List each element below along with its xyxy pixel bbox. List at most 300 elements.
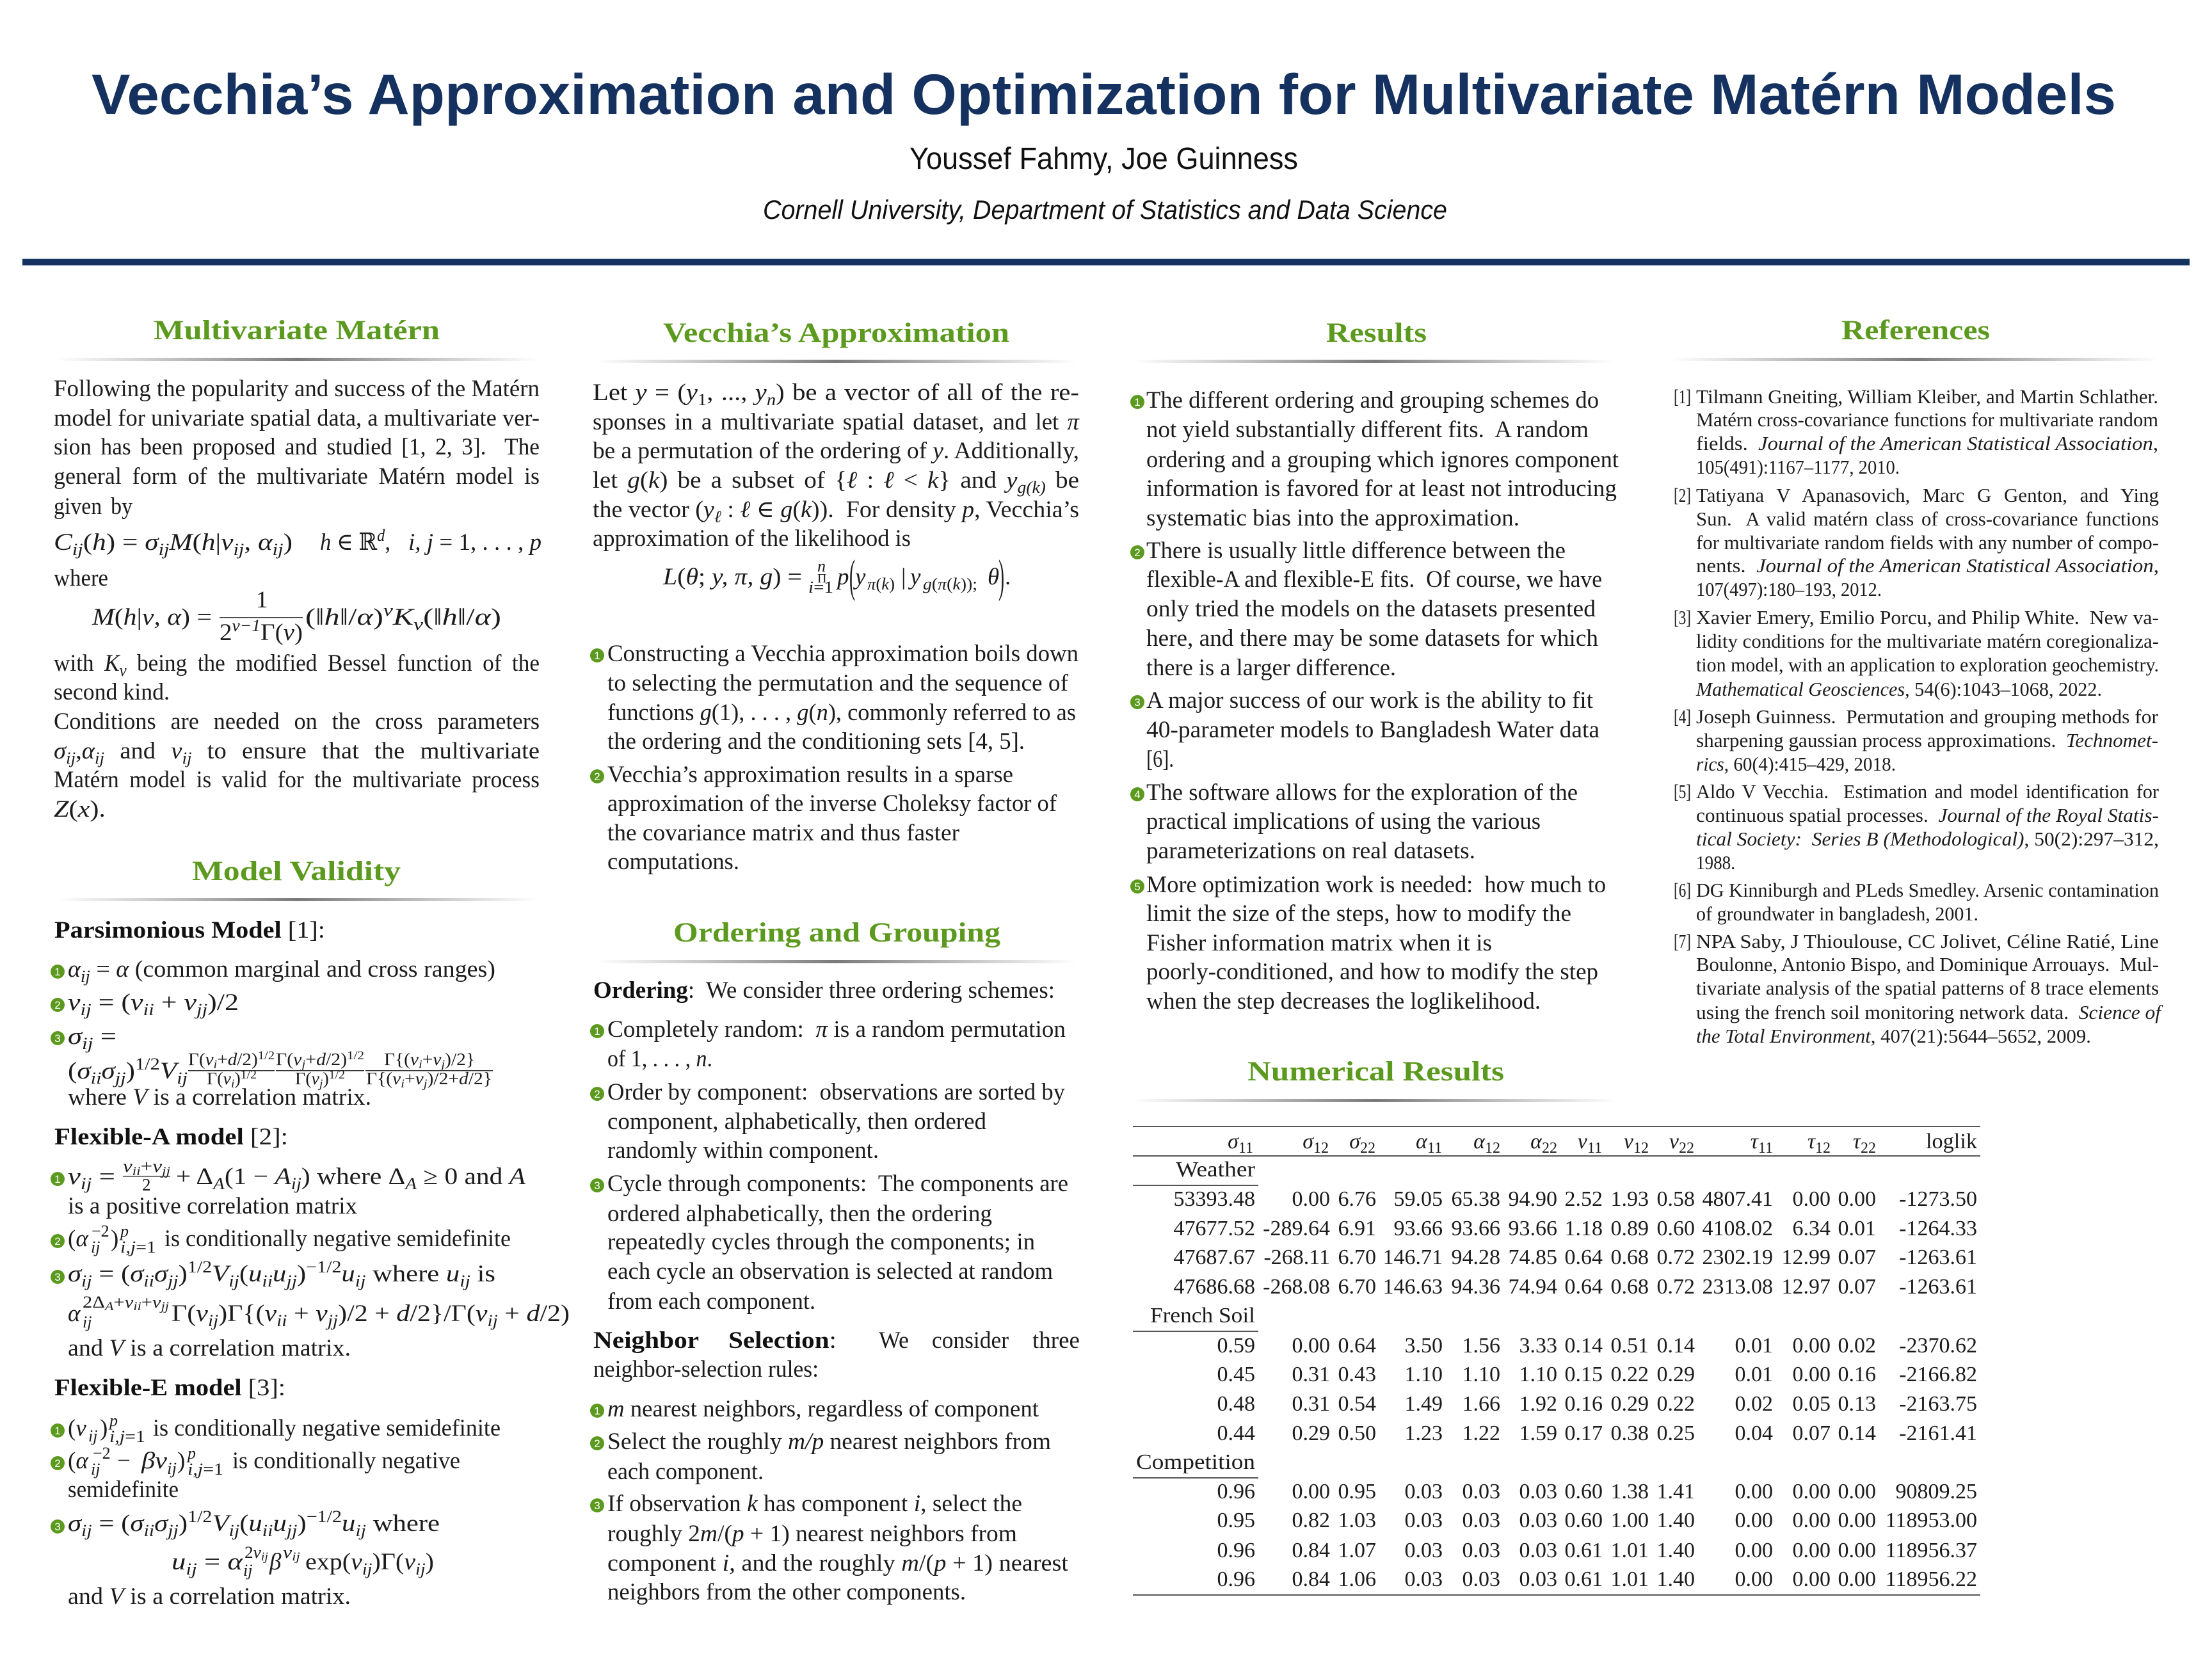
header [22, 62, 2190, 266]
explanatory text: Conditions are needed on the cross parameters [54, 709, 540, 735]
table header row: ν [1624, 1130, 1634, 1153]
group: competition: 0.03 [1519, 1567, 1557, 1591]
flexible-a list: 2Δ [83, 1293, 102, 1311]
equation: vecchia likelihood: | [901, 564, 906, 590]
flexible-e list: ) [177, 1448, 185, 1474]
parsimonious model list: σ [102, 1058, 116, 1084]
reference 4 [1674, 705, 2159, 775]
flexible-a list: A [507, 1164, 525, 1190]
flexible-a list: jj [159, 1300, 169, 1313]
flexible-a list: ( [239, 1261, 248, 1287]
reference 3: [3] [1674, 606, 1691, 629]
group: french soil: French Soil [1150, 1304, 1255, 1327]
group: competition: 0.84 [1292, 1567, 1330, 1591]
group: weather: -1273.50 [1899, 1187, 1977, 1211]
vecchia list: 2 [594, 771, 600, 783]
group: weather: 4108.02 [1703, 1217, 1773, 1240]
group: weather: 93.66 [1394, 1217, 1443, 1240]
vecchia list [590, 641, 1078, 875]
parsimonious model list: 1/2 [329, 1068, 345, 1082]
flexible-e list: is conditionally negative [232, 1448, 460, 1474]
group: competition: 1.41 [1656, 1480, 1695, 1503]
flexible-a list: ν [68, 1164, 81, 1190]
group: competition: 0.95 [1338, 1480, 1376, 1503]
table header row: ν [1578, 1130, 1588, 1153]
equation: cross covariance: M [168, 529, 194, 556]
equation: vecchia likelihood [662, 550, 1011, 602]
group: weather: 12.97 [1782, 1275, 1831, 1299]
results list: 5 [1134, 881, 1141, 893]
group: weather [1174, 1158, 1977, 1299]
group: competition: 0.61 [1564, 1539, 1603, 1562]
group: competition: 0.00 [1838, 1539, 1876, 1562]
group: competition: 1.40 [1656, 1539, 1695, 1562]
subheading: flexible-a model: Flexible-A model [2]: [54, 1124, 288, 1150]
reference 2: Tatiyana V Apanasovich, Marc G Genton, and Ying [1696, 484, 2159, 506]
table header row: 12 [1485, 1140, 1500, 1157]
flexible-e list: 1/2 [188, 1507, 212, 1526]
group: weather: 12.99 [1782, 1246, 1831, 1269]
group: weather: -1263.61 [1899, 1275, 1977, 1299]
group: weather: -1263.61 [1899, 1246, 1977, 1269]
group: french soil: 3.50 [1404, 1334, 1443, 1358]
flexible-a list: p [119, 1222, 129, 1240]
equation: matern function: (‖h‖/α) [305, 604, 381, 630]
reference 7: Boulonne, Antonio Bispo, and Dominique Arrouays. Mul- [1696, 953, 2159, 975]
ordering intro: Ordering: We consider three ordering schemes: [593, 977, 1055, 1004]
equation: vecchia likelihood: ( [849, 550, 855, 602]
equation: cross covariance: d [377, 526, 385, 545]
flexible-a list: σ [154, 1261, 169, 1287]
parsimonious model list: ν [68, 990, 81, 1016]
explanatory text: Matérn model is valid for the multivariate process [54, 767, 540, 793]
table header row: τ [1807, 1130, 1816, 1153]
group: competition: 1.38 [1610, 1480, 1649, 1503]
flexible-a list: ν [123, 1157, 132, 1176]
heading: ordering and grouping: Ordering and Grouping [673, 918, 1001, 948]
group: weather: 47686.68 [1174, 1275, 1255, 1299]
flexible-a list: jj [325, 1311, 338, 1330]
flexible-e list: ij [362, 1560, 372, 1578]
group: competition: 0.96 [1217, 1539, 1255, 1562]
group: competition: 0.60 [1564, 1509, 1603, 1532]
group: competition: 1.01 [1610, 1567, 1649, 1591]
parsimonious model list: σ [68, 1023, 83, 1050]
group: competition: 0.82 [1292, 1509, 1330, 1532]
flexible-e list: ν [404, 1549, 416, 1575]
group: weather: 93.66 [1452, 1217, 1500, 1240]
group: french soil: 0.02 [1735, 1392, 1773, 1416]
parsimonious model list: ν [184, 990, 197, 1016]
ordering list: 1 [594, 1025, 600, 1038]
flexible-e list: )Γ( [372, 1549, 404, 1575]
equation: matern function: 2 [220, 620, 232, 646]
neighbor selection intro: neighbor-selection rules: [593, 1356, 819, 1382]
flexible-e list: βν [141, 1448, 168, 1474]
group: french soil: 0.64 [1338, 1334, 1376, 1358]
results list: practical implications of using the various [1146, 808, 1541, 835]
equation: cross covariance: ij [273, 540, 284, 559]
flexible-a list: 2 [142, 1175, 151, 1194]
reference 1: Tilmann Gneiting, William Kleiber, and Martin Schlather. [1696, 385, 2158, 408]
flexible-e list: u [248, 1511, 262, 1537]
group: french soil: 0.22 [1656, 1392, 1695, 1416]
group: weather: 94.36 [1452, 1275, 1500, 1299]
definition text: : [721, 497, 740, 523]
group: competition: 118956.22 [1886, 1567, 1977, 1591]
results list: not yield substantially different fits. A random [1146, 417, 1589, 443]
panel: references [1672, 316, 2163, 1047]
flexible-a list: i,j=1 [120, 1238, 156, 1256]
reference 5 [1674, 780, 2160, 874]
group: french soil: 0.50 [1338, 1422, 1376, 1445]
neighbor selection list: If observation k has component i, select the [607, 1491, 1022, 1517]
table header row: α [1473, 1130, 1486, 1153]
equation: matern function: ν [383, 601, 394, 620]
equation: cross covariance: ij [72, 540, 83, 559]
parsimonious model list: )/2+ [428, 1069, 459, 1088]
group: french soil: 0.31 [1292, 1363, 1330, 1386]
group: competition: 0.96 [1217, 1480, 1255, 1503]
flexible-e list: where [366, 1511, 440, 1537]
parsimonious model list: Γ(ν [295, 1069, 319, 1088]
results list: [6]. [1146, 746, 1174, 773]
explanatory text: ij [95, 749, 104, 767]
flexible-e list: ) [100, 1415, 108, 1441]
flexible-a list: ) where Δ [301, 1164, 405, 1190]
group: competition: 118953.00 [1886, 1509, 1977, 1532]
group: competition: 0.03 [1462, 1539, 1500, 1562]
group: competition: 0.03 [1404, 1480, 1443, 1503]
heading: results: Results [1326, 318, 1427, 348]
parsimonious model list: ij [177, 1069, 188, 1087]
reference 5: 1988. [1696, 851, 1735, 874]
intro text: Following the popularity and success of the Matérn [54, 376, 540, 402]
parsimonious model list: + [405, 1069, 415, 1088]
group: weather: 65.38 [1452, 1187, 1500, 1211]
table header row: 12 [1313, 1140, 1329, 1157]
definition text: Let y = (y [593, 380, 696, 406]
group: competition: 0.00 [1838, 1509, 1876, 1532]
reference 1: fields. Journal of the American Statistical Association , [1696, 432, 2158, 454]
flexible-e list: and V is a correlation matrix. [68, 1583, 351, 1610]
table header row: α [1416, 1130, 1428, 1153]
flexible-a list: A [212, 1174, 225, 1193]
explanatory text: ij [182, 749, 192, 767]
neighbor selection intro: Neighbor [593, 1327, 699, 1354]
definition text: ) be a vector of all of the re- [776, 380, 1079, 406]
flexible-a list: ij [228, 1272, 239, 1290]
header divider bar [22, 259, 2190, 266]
parsimonious model list: 1/2 [347, 1049, 364, 1062]
group: weather: 2302.19 [1703, 1246, 1773, 1269]
flexible-e list: σ [154, 1511, 169, 1537]
parsimonious model list: i [231, 1077, 234, 1091]
flexible-a list: = ( [92, 1261, 130, 1287]
group: weather: 0.72 [1656, 1275, 1695, 1299]
ordering list: Completely random: π is a random permutation [607, 1016, 1066, 1043]
group: french soil: 1.49 [1404, 1392, 1443, 1416]
flexible-a list: + Δ [176, 1164, 209, 1190]
flexible-e list: 2ν [244, 1543, 260, 1562]
group: competition: 0.03 [1462, 1509, 1500, 1532]
group: weather: 93.66 [1508, 1217, 1557, 1240]
neighbor selection intro: consider [932, 1327, 1009, 1354]
parsimonious model list: ) [126, 1058, 135, 1084]
neighbor selection list: roughly 2m/(p + 1) nearest neighbors from [607, 1521, 1017, 1547]
equation: cross covariance: ij [233, 540, 244, 559]
parsimonious model list: 1/2 [135, 1055, 160, 1073]
results list: when the step decreases the loglikelihood. [1146, 988, 1541, 1014]
group: weather: 0.07 [1838, 1246, 1876, 1269]
reference 6: [6] [1674, 879, 1691, 901]
group: weather: 0.89 [1610, 1217, 1649, 1240]
group: weather: 0.07 [1838, 1275, 1876, 1299]
vecchia list: Constructing a Vecchia approximation boils down [607, 641, 1078, 667]
results list: 2 [1134, 547, 1141, 559]
group: french soil: 0.43 [1338, 1363, 1376, 1386]
parsimonious model list: d/2) [316, 1050, 345, 1069]
flexible-e list: i,j=1 [188, 1460, 223, 1479]
group: french soil: 0.29 [1656, 1363, 1695, 1386]
flexible-a list: ij [487, 1311, 498, 1330]
group: french soil: 0.22 [1610, 1363, 1649, 1386]
group: competition: 0.00 [1792, 1480, 1831, 1503]
parsimonious model list: ii [91, 1069, 102, 1087]
flexible-e list: 1 [54, 1425, 61, 1437]
flexible-a list: + [498, 1301, 526, 1327]
table header row: 11 [1758, 1140, 1773, 1157]
heading: references: References [1841, 316, 1990, 346]
parsimonious model list: ν [433, 1050, 441, 1069]
flexible-a list: A [104, 1300, 114, 1313]
group: competition: 0.03 [1404, 1509, 1443, 1532]
reference 7: tivariate analysis of the spatial patterns of 8 trace elements [1696, 977, 2159, 999]
results list: ordering and a grouping which ignores component [1146, 447, 1619, 473]
flexible-e list: ) [426, 1549, 434, 1575]
flexible-e list: jj [166, 1521, 179, 1540]
flexible-e list: = ( [92, 1511, 130, 1537]
flexible-a list: and V is a correlation matrix. [68, 1335, 351, 1361]
parsimonious model list: (σ [68, 1058, 89, 1084]
flexible-e list: ) [179, 1511, 188, 1537]
table header row [1228, 1130, 1977, 1157]
group: competition: 0.95 [1217, 1509, 1255, 1532]
flexible-a list: −2 [92, 1222, 109, 1240]
flexible-a list: ) [297, 1261, 306, 1287]
explanatory text: Z(x). [54, 796, 106, 822]
group: competition: 1.03 [1338, 1509, 1376, 1532]
flexible-a list: + [141, 1157, 152, 1176]
affiliation: Cornell University, Department of Statistics and Data Science [763, 195, 1447, 225]
flexible-e list: (ν [68, 1415, 86, 1441]
flexible-a list: σ [68, 1261, 83, 1287]
neighbor selection intro: three [1032, 1327, 1080, 1354]
flexible-e list: ii [143, 1521, 154, 1540]
group: competition: 0.00 [1792, 1567, 1831, 1591]
parsimonious model list: = [90, 956, 116, 982]
flexible-e list: ij [186, 1560, 197, 1578]
neighbor selection list [590, 1396, 1069, 1605]
heading: multivariate matern: Multivariate Matérn [154, 316, 440, 346]
flexible-e list: α [228, 1549, 244, 1575]
table header row: τ [1853, 1130, 1862, 1153]
flexible-e list: i,j=1 [109, 1427, 145, 1446]
group: weather: 1.18 [1564, 1217, 1603, 1240]
group: weather: 47677.52 [1174, 1217, 1255, 1240]
parsimonious model list: α (common marginal and cross ranges) [116, 956, 485, 982]
parsimonious model list: 2 [54, 999, 61, 1011]
equation: matern function: ν−1 [232, 616, 260, 635]
flexible-a list [51, 1157, 570, 1361]
flexible-a list: Γ(ν [172, 1301, 207, 1327]
definition text: be [1046, 467, 1079, 493]
intro text: general form of the multivariate Matérn model is [54, 463, 540, 490]
equation: vecchia likelihood: n [817, 557, 826, 575]
group: french soil: 0.29 [1610, 1392, 1649, 1416]
results list: systematic bias into the approximation. [1146, 505, 1519, 531]
equation: vecchia likelihood: ) [998, 550, 1004, 602]
vecchia list: to selecting the permutation and the sequence of [607, 670, 1069, 696]
definition text: n [767, 390, 776, 409]
equation: vecchia likelihood: i=1 [808, 578, 833, 597]
flexible-a list: u [273, 1261, 286, 1287]
parsimonious model list: d/2} [459, 1069, 490, 1088]
flexible-a list: u [341, 1261, 355, 1287]
flexible-a list: = [92, 1164, 115, 1190]
group: competition [1136, 1450, 1977, 1591]
ordering list: Cycle through components: The components are [607, 1171, 1068, 1197]
equation: cross covariance: α [258, 529, 274, 556]
equation: vecchia likelihood: π(k) [867, 575, 895, 593]
flexible-a list: where [365, 1261, 446, 1287]
results list: poorly-conditioned, and how to modify the step [1146, 959, 1598, 985]
group: competition: 0.03 [1519, 1480, 1557, 1503]
flexible-a list: A [404, 1174, 417, 1193]
neighbor selection list: neighbors from the other components. [607, 1579, 966, 1605]
panel: multivariate matern [54, 316, 541, 822]
flexible-a list: 1/2 [188, 1258, 212, 1276]
neighbor selection list: 2 [594, 1438, 600, 1450]
group: weather: 1.93 [1610, 1187, 1649, 1211]
explanatory text: α [82, 738, 96, 764]
table header row: 12 [1815, 1140, 1831, 1157]
flexible-a list: ii [133, 1300, 141, 1313]
group: french soil: 1.56 [1462, 1334, 1500, 1358]
flexible-e list: ij [415, 1560, 426, 1578]
group: weather: -268.08 [1263, 1275, 1330, 1299]
results list: 4 [1134, 789, 1141, 801]
flexible-a list: ii [276, 1311, 287, 1330]
flexible-e list: β [269, 1549, 282, 1575]
group: weather: 2313.08 [1703, 1275, 1773, 1299]
group: competition: 0.00 [1735, 1509, 1773, 1532]
reference 6 [1674, 879, 2159, 925]
subheading: parsimonious model: Parsimonious Model [1]: [54, 917, 325, 943]
definition text: y [752, 380, 767, 406]
reference 4: [4] [1674, 705, 1691, 728]
group: french soil: 1.10 [1462, 1363, 1500, 1386]
panel: multivariate matern: where [54, 565, 108, 591]
flexible-e list: 2 [54, 1457, 61, 1470]
definition text: , ..., [707, 380, 755, 406]
flexible-e list [51, 1411, 501, 1610]
intro text: given by [54, 493, 132, 520]
equation: matern function: 1 [256, 587, 268, 613]
reference 2 [1674, 484, 2159, 600]
group: french soil: -2163.75 [1899, 1392, 1977, 1416]
group: weather: 47687.67 [1174, 1246, 1255, 1269]
reference 6: DG Kinniburgh and PLeds Smedley. Arsenic contamination [1696, 879, 2159, 901]
table header row: 11 [1427, 1140, 1442, 1157]
group: french soil: 0.07 [1792, 1422, 1831, 1445]
results list: 40-parameter models to Bangladesh Water data [1146, 717, 1599, 743]
flexible-a list: is [470, 1261, 495, 1287]
group: french soil: -2161.41 [1899, 1422, 1977, 1445]
group: weather: 94.28 [1452, 1246, 1500, 1269]
flexible-a list: 2 [54, 1235, 61, 1247]
equation: cross covariance: , [385, 529, 390, 556]
group: competition: 0.00 [1792, 1539, 1831, 1562]
ordering list: 3 [594, 1180, 600, 1192]
group: weather: 0.68 [1610, 1275, 1649, 1299]
flexible-a list: ij [208, 1311, 218, 1330]
parsimonious model list: + [305, 1050, 316, 1069]
reference 7: [7] [1674, 930, 1691, 952]
equation: vecchia likelihood: θ [988, 564, 999, 590]
flexible-a list: A [273, 1164, 291, 1190]
parsimonious model list: + [217, 1050, 228, 1069]
results list: limit the size of the steps, how to modify the [1146, 901, 1571, 927]
group: weather: -268.11 [1263, 1246, 1330, 1269]
parsimonious model list: j [300, 1058, 305, 1071]
results list: flexible-A and flexible-E fits. Of course, we have [1146, 566, 1602, 593]
parsimonious model list: Γ(ν [207, 1069, 231, 1088]
flexible-a list: ii [132, 1165, 141, 1178]
flexible-e list: p [186, 1444, 196, 1463]
table header row: 12 [1633, 1140, 1649, 1157]
table header row: ν [1669, 1130, 1679, 1153]
reference 4: sharpening gaussian process approximations. Technomet- [1696, 729, 2158, 751]
explanatory text: second kind. [54, 679, 170, 705]
reference 3: lidity conditions for the multivariate matérn coregionaliza- [1696, 630, 2159, 652]
group: competition: 0.00 [1735, 1567, 1773, 1591]
parsimonious model list: Γ(ν [276, 1050, 301, 1069]
group: weather: 6.34 [1792, 1217, 1831, 1240]
flexible-a list: u [446, 1261, 460, 1287]
intro text: sion has been proposed and studied [1, 2, 3]. The [54, 434, 540, 460]
flexible-e list: ij [292, 1550, 300, 1564]
vecchia list: computations. [607, 849, 739, 875]
group: competition: 0.03 [1519, 1539, 1557, 1562]
flexible-e list: σ [130, 1511, 145, 1537]
flexible-e list: = [197, 1549, 228, 1575]
neighbor selection list: 3 [594, 1500, 600, 1512]
explanatory text: ij [66, 749, 76, 767]
parsimonious model list: ν [415, 1069, 424, 1088]
panel: ordering and grouping [590, 918, 1080, 1605]
parsimonious model list: 1/2 [241, 1068, 257, 1082]
vecchia list: functions g(1), . . . , g(n), commonly referred to as [607, 700, 1076, 726]
results list: parameterizations on real datasets. [1146, 838, 1475, 864]
parsimonious model list [51, 956, 495, 1110]
reference 4: rics, 60(4):415–429, 2018. [1696, 753, 1896, 775]
group: french soil: 1.10 [1404, 1363, 1443, 1386]
group: french soil: 0.13 [1838, 1392, 1876, 1416]
equation: matern function: ν [413, 615, 424, 634]
parsimonious model list: i [419, 1058, 422, 1071]
parsimonious model list: V [160, 1058, 180, 1084]
